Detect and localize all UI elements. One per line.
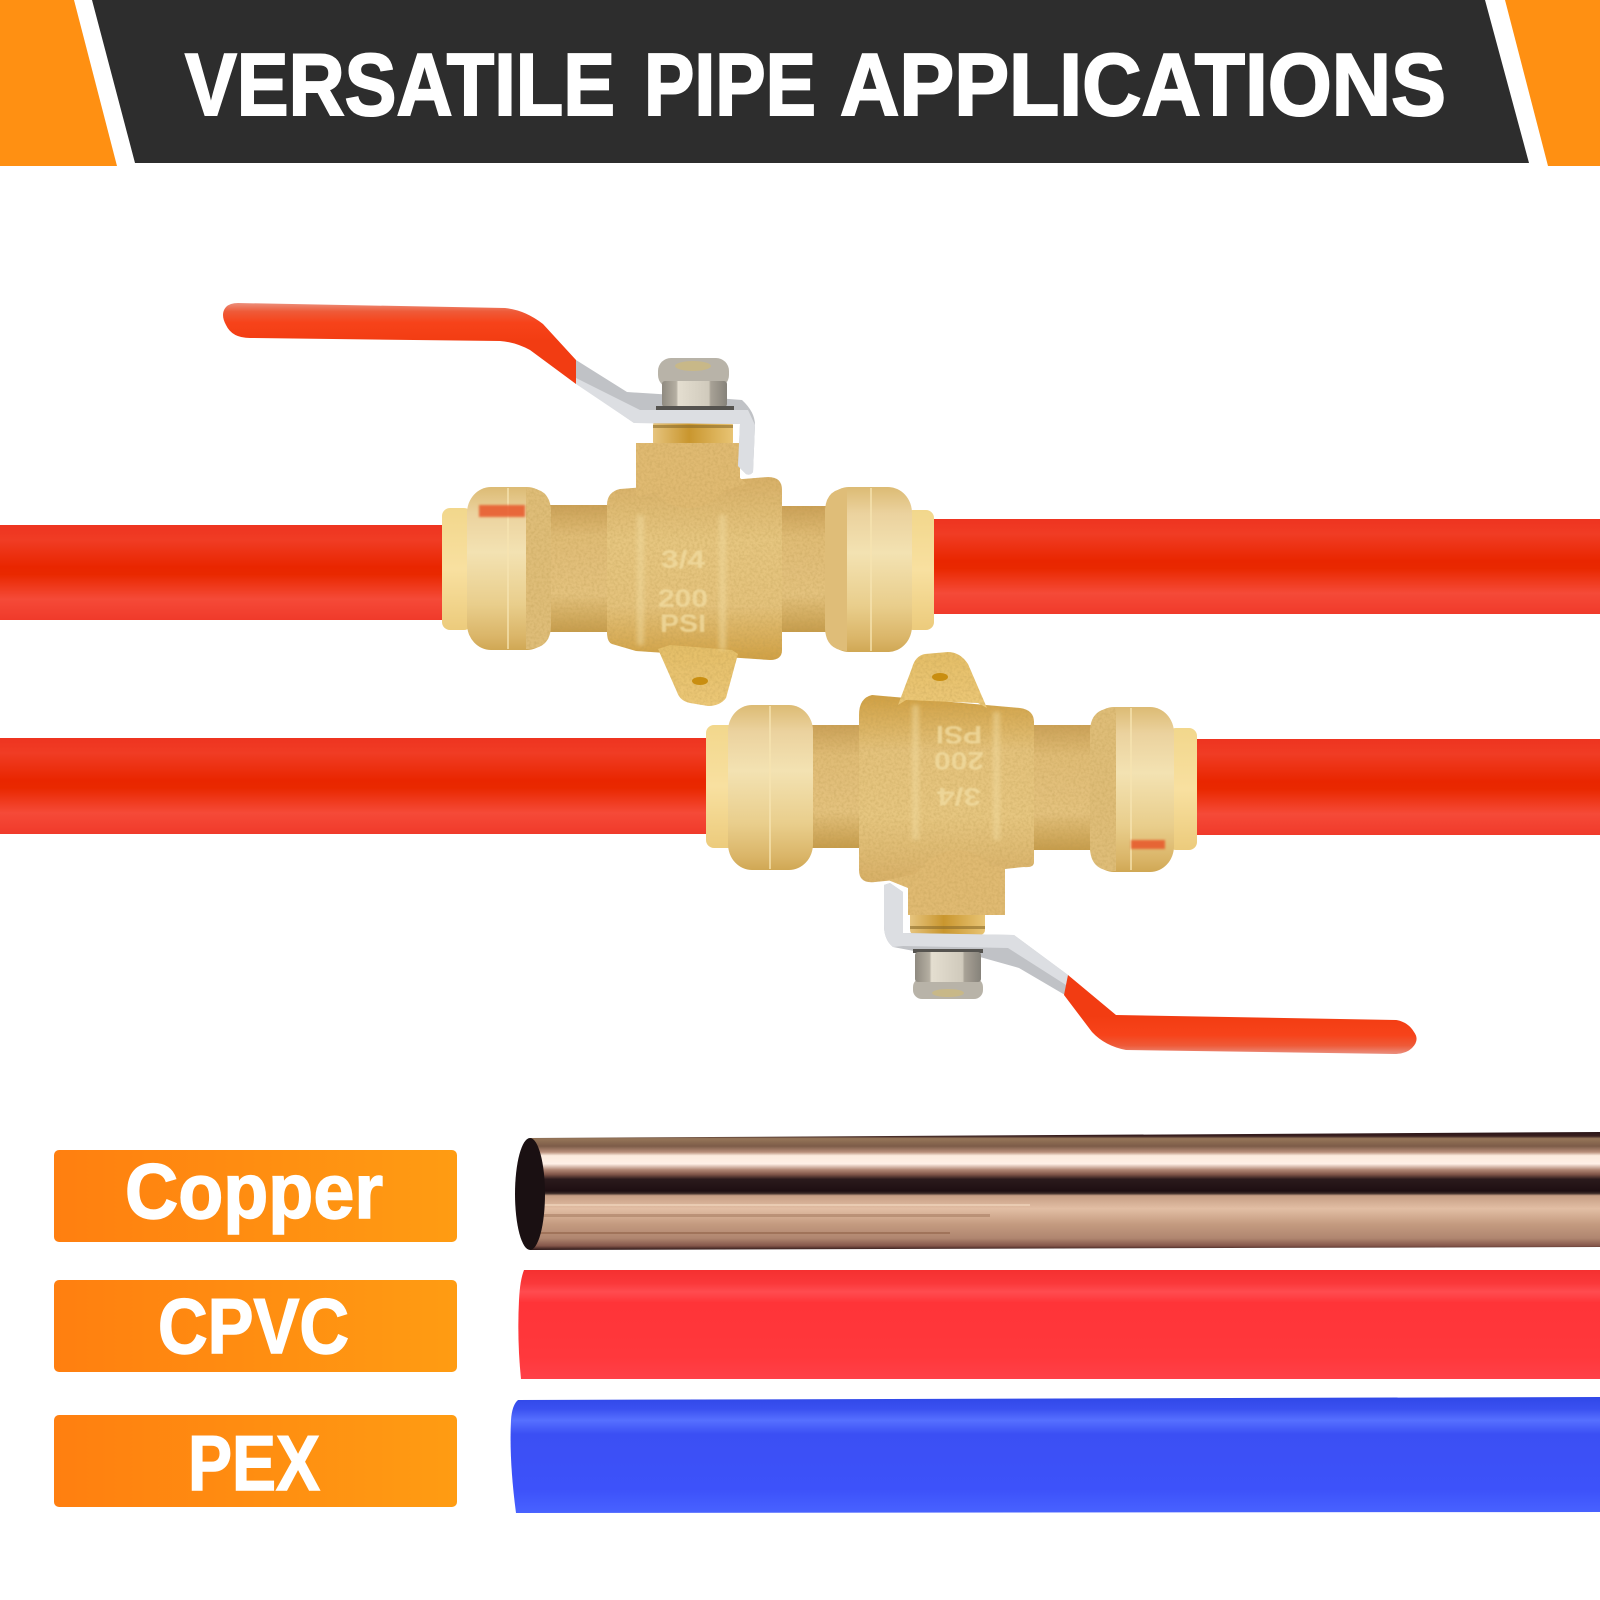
body highlights (637, 515, 726, 650)
valve neck (634, 443, 747, 508)
valve neck (888, 850, 1005, 915)
embossed markings: 3/4 (661, 546, 705, 574)
label: CPVC: CPVC (158, 1282, 349, 1370)
upper red pipe left (0, 525, 446, 620)
red handle grip (223, 303, 576, 384)
right neck (1032, 725, 1092, 850)
stem nut (913, 949, 983, 999)
red handle grip (1064, 975, 1417, 1054)
embossed markings: 3/4 (937, 782, 981, 810)
CPVC red pipe sample (518, 1270, 1600, 1379)
lug hole (692, 677, 708, 685)
body highlights (912, 705, 1000, 840)
upper pipe run (0, 519, 1600, 620)
label: PEX (54, 1415, 457, 1507)
lug hole (932, 673, 948, 681)
PEX blue pipe sample (511, 1397, 1600, 1513)
right orange accent (1505, 0, 1600, 166)
stem nut (656, 358, 734, 410)
lower ball valve (706, 652, 1417, 1054)
title: APPLICATIONS (840, 35, 1446, 134)
label: PEX: PEX (188, 1419, 320, 1507)
right neck (780, 506, 827, 632)
lower red pipe left (0, 738, 710, 834)
left neck (811, 725, 861, 848)
title (185, 35, 1446, 134)
brass castings (811, 652, 1092, 915)
left neck (549, 505, 609, 632)
upper red pipe right (930, 519, 1600, 614)
embossed markings: 200 (658, 585, 708, 613)
copper pipe opening (515, 1138, 545, 1250)
dark title band (92, 0, 1529, 163)
embossed markings: PSI (660, 610, 706, 638)
label: CPVC (54, 1280, 457, 1372)
lower pipe run (0, 738, 1600, 835)
left orange accent (0, 0, 117, 166)
embossed markings: 200 (934, 746, 984, 774)
upper ball valve (223, 303, 934, 706)
valve body (607, 477, 782, 660)
brass stem (653, 420, 733, 447)
embossed markings: PSI (936, 720, 982, 748)
embossed markings (658, 546, 708, 638)
brass stem (910, 908, 985, 935)
valve body (859, 695, 1034, 882)
lower red pipe right (1192, 739, 1600, 835)
label: copper (54, 1147, 457, 1242)
copper pipe sample (515, 1132, 1600, 1250)
title: VERSATILE (185, 35, 615, 134)
brass castings (549, 443, 827, 706)
handle lever (884, 883, 1068, 995)
header banner (0, 0, 1600, 166)
embossed markings (934, 720, 984, 810)
left coupling (706, 705, 813, 870)
pipe type legend (54, 1147, 457, 1507)
mounting lug (658, 645, 738, 706)
label: copper: Copper (125, 1147, 383, 1235)
left coupling (442, 487, 551, 650)
right coupling (1090, 707, 1197, 872)
handle lever (576, 360, 755, 475)
mounting lug (898, 652, 987, 708)
title: PIPE (644, 35, 816, 134)
right coupling (825, 487, 934, 652)
